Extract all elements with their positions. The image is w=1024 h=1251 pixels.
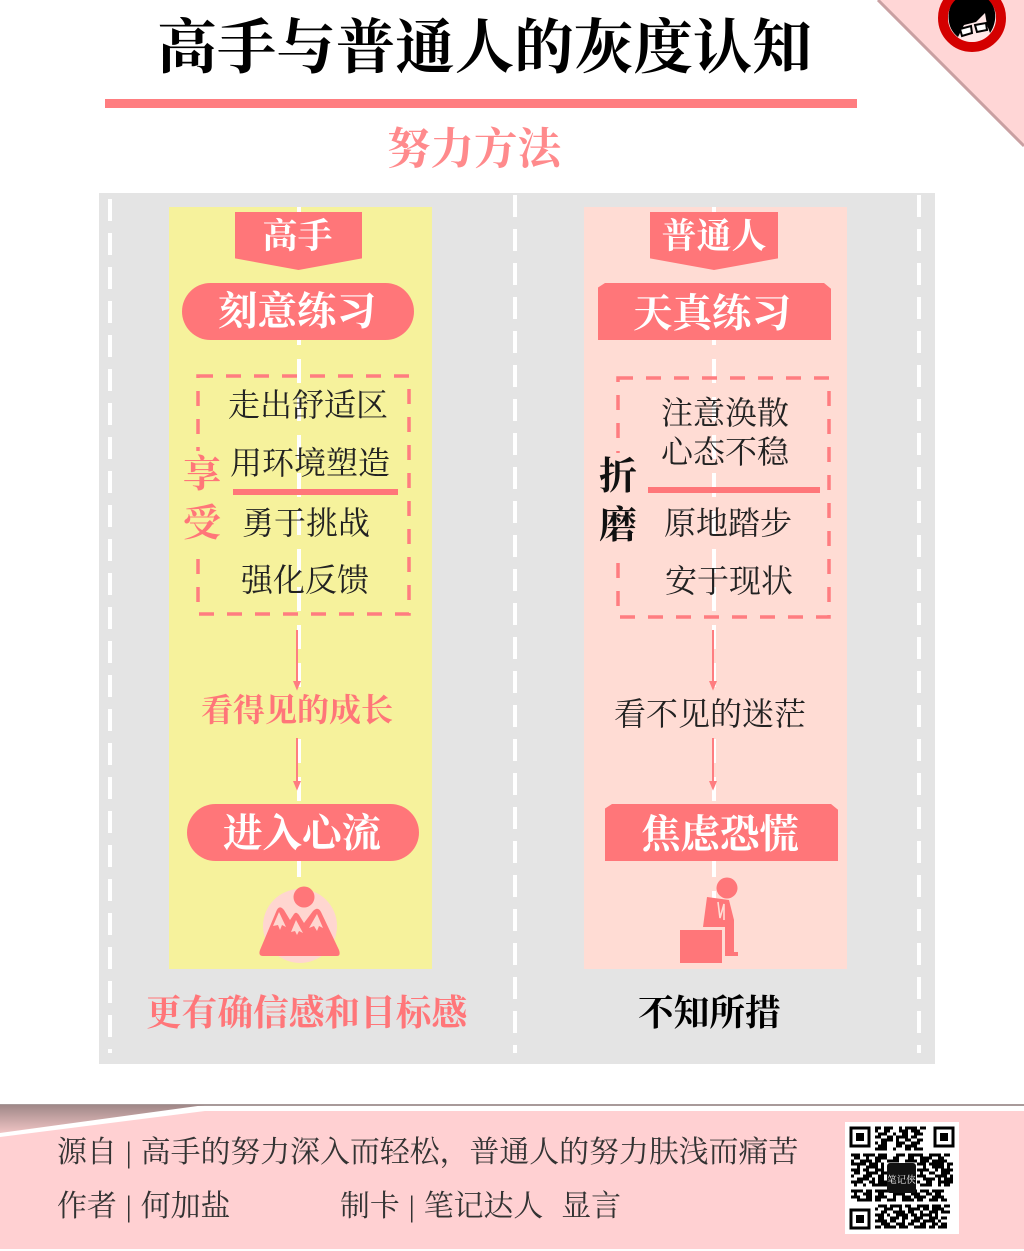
experts dashed box — [196, 374, 411, 616]
item: 注意涣散 — [661, 395, 789, 431]
QR code: 笔记侠 — [887, 1174, 916, 1186]
title underline — [105, 99, 857, 108]
item: 勇于挑战 — [242, 505, 370, 541]
flow state pill — [187, 804, 419, 861]
visible growth: 看得见的成长 — [201, 692, 393, 728]
label: torment: 折磨 — [599, 456, 637, 547]
ordinary list — [661, 395, 793, 599]
item: 心态不稳 — [661, 434, 789, 470]
corner ribbon with avatar — [877, 0, 1024, 147]
footer band — [0, 1103, 1024, 1249]
panel: experts column — [169, 207, 432, 969]
flow state pill: 进入心流 — [223, 812, 381, 856]
footer source: 源自 | 高手的努力深入而轻松，普通人的努力肤浅而痛苦 — [57, 1136, 798, 1169]
deliberate practice pill — [182, 283, 414, 340]
ordinary header label: 普通人 — [661, 217, 766, 256]
experts list — [228, 387, 390, 598]
item: 安于现状 — [665, 563, 793, 599]
conclusion: experts: 更有确信感和目标感 — [146, 993, 467, 1033]
panel: ordinary people column — [584, 207, 847, 969]
item: 强化反馈 — [241, 562, 369, 598]
panel: comparison background — [99, 193, 935, 1064]
item: 原地踏步 — [664, 505, 792, 541]
label: enjoy: 享受 — [183, 454, 221, 545]
footer author: 作者 | 何加盐 — [57, 1190, 230, 1223]
item: 用环境塑造 — [230, 445, 390, 481]
ordinary dashed box — [616, 376, 831, 619]
conclusion: ordinary: 不知所措 — [638, 993, 781, 1033]
icon: sitting person — [680, 878, 738, 963]
naive practice tag — [598, 283, 831, 340]
anxiety tag — [605, 804, 838, 861]
invisible confusion: 看不见的迷茫 — [614, 696, 806, 732]
arrows: ordinary — [709, 630, 717, 790]
ordinary header badge — [650, 212, 778, 270]
naive practice tag: 天真练习 — [633, 292, 791, 336]
arrows: experts — [293, 630, 301, 790]
item: 走出舒适区 — [228, 387, 388, 423]
anxiety tag: 焦虑恐慌 — [641, 813, 799, 857]
QR code — [845, 1122, 959, 1234]
experts divider — [233, 489, 398, 495]
ordinary divider — [648, 487, 820, 493]
subtitle: 努力方法 — [387, 126, 561, 174]
deliberate practice pill: 刻意练习 — [218, 290, 376, 334]
experts header label: 高手 — [262, 217, 332, 256]
icon: mountains — [259, 886, 340, 963]
experts header badge — [235, 212, 362, 270]
title: 高手与普通人的灰度认知 — [157, 15, 812, 81]
footer producer: 制卡 | 笔记达人 显言 — [340, 1190, 621, 1223]
